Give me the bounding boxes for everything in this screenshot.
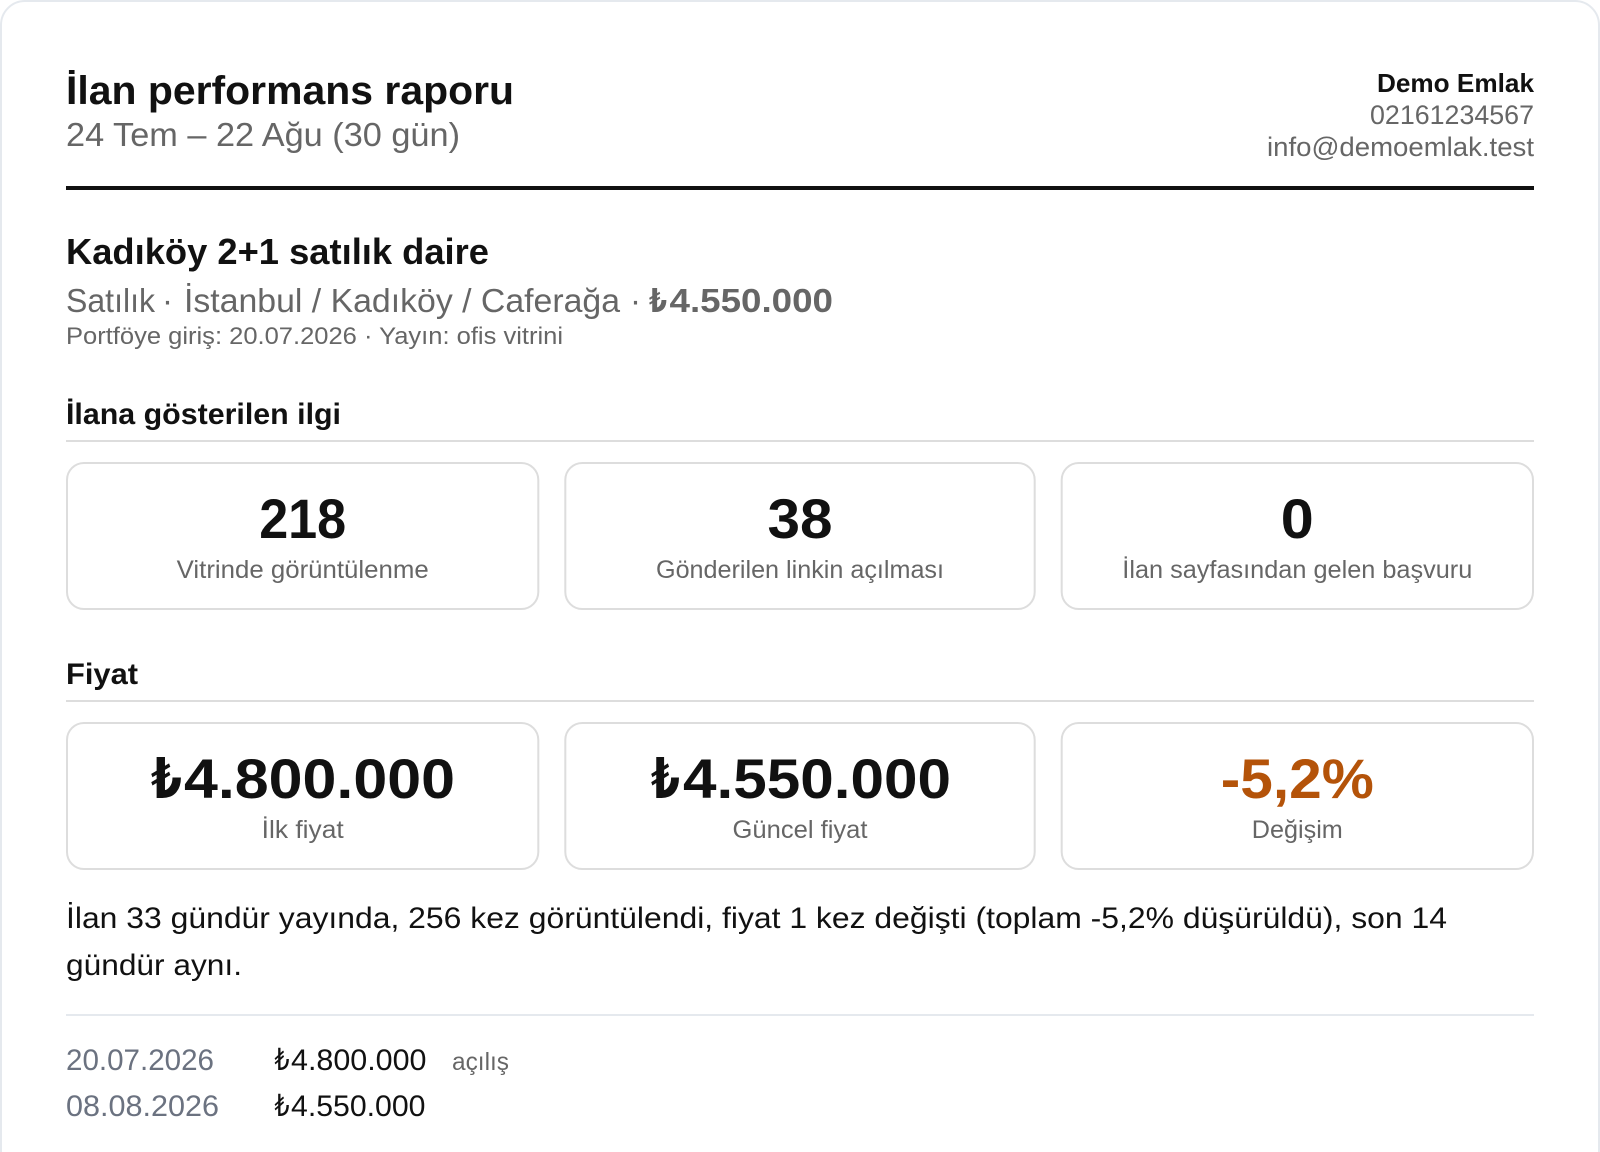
stat card: link opens: Gönderilen linkin açılması: [656, 556, 944, 584]
history row: opening: [66, 1044, 509, 1077]
agency contact: 02161234567: [1370, 100, 1534, 130]
section: interest: [66, 398, 1534, 609]
history row: opening: 20.07.2026: [66, 1044, 214, 1077]
stat card: current price: 4.550.000: [683, 747, 951, 810]
history row: opening: ₺: [274, 1044, 290, 1077]
listing price: ₺: [649, 282, 667, 319]
listing title: Kadıköy 2+1 satılık daire: [66, 231, 489, 272]
stat card: link opens: [565, 463, 1035, 609]
history row: price drop: 4.550.000: [291, 1090, 426, 1123]
summary text: İlan 33 gündür yayında, 256 kez görüntülendi, fiyat 1 kez değişti (toplam -5,2% düşürüldü), son 14: [66, 902, 1447, 935]
section: price: [66, 658, 1534, 869]
stat card: showcase views: 218: [259, 487, 346, 550]
stat card: first price: [67, 723, 538, 869]
stat card: first price: İlk fiyat: [262, 815, 344, 844]
listing location: ·: [630, 282, 641, 319]
listing meta: Portföye giriş: 20.07.2026 · Yayın: ofis vitrini: [66, 323, 563, 350]
section heading: Fiyat: [66, 658, 138, 691]
history row: opening: açılış: [452, 1048, 509, 1076]
header: [66, 68, 1535, 162]
history row: opening: 4.800.000: [291, 1044, 426, 1077]
stat card: applications: 0: [1281, 487, 1314, 550]
agency contact: info@demoemlak.test: [1267, 132, 1535, 162]
stat card: change: -5,2%: [1221, 747, 1374, 810]
stat card: current price: ₺: [651, 747, 680, 810]
summary text: gündür aynı.: [66, 949, 242, 982]
stat card: applications: İlan sayfasından gelen başvuru: [1122, 555, 1472, 584]
listing summary: [66, 231, 833, 350]
history row: price drop: ₺: [274, 1090, 290, 1123]
section heading: İlana gösterilen ilgi: [66, 398, 341, 431]
agency contact: [1267, 68, 1535, 162]
stat card: showcase views: Vitrinde görüntülenme: [177, 556, 429, 584]
stat card: applications: [1062, 463, 1533, 609]
date range: 24 Tem – 22 Ağu (30 gün): [66, 116, 460, 153]
listing location: ·: [162, 282, 173, 319]
history row: price drop: [66, 1090, 426, 1123]
stat card: first price: ₺: [151, 747, 182, 810]
listing location: Satılık: [66, 282, 155, 319]
title: İlan performans raporu: [66, 69, 514, 113]
listing location: İstanbul / Kadıköy / Caferağa: [184, 282, 621, 319]
stat card: showcase views: [67, 463, 538, 609]
stat card: link opens: 38: [768, 487, 832, 550]
history row: price drop: 08.08.2026: [66, 1090, 219, 1123]
stat card: change: Değişim: [1252, 816, 1343, 844]
price history: [66, 1044, 509, 1123]
header rule: [66, 186, 1534, 190]
agency contact: Demo Emlak: [1377, 68, 1535, 98]
stat card: change: [1062, 723, 1533, 869]
stat card: first price: 4.800.000: [184, 747, 455, 810]
stat card: current price: [565, 723, 1035, 869]
listing price: 4.550.000: [670, 282, 833, 319]
summary text: [66, 902, 1447, 982]
stat card: current price: Güncel fiyat: [732, 816, 868, 844]
